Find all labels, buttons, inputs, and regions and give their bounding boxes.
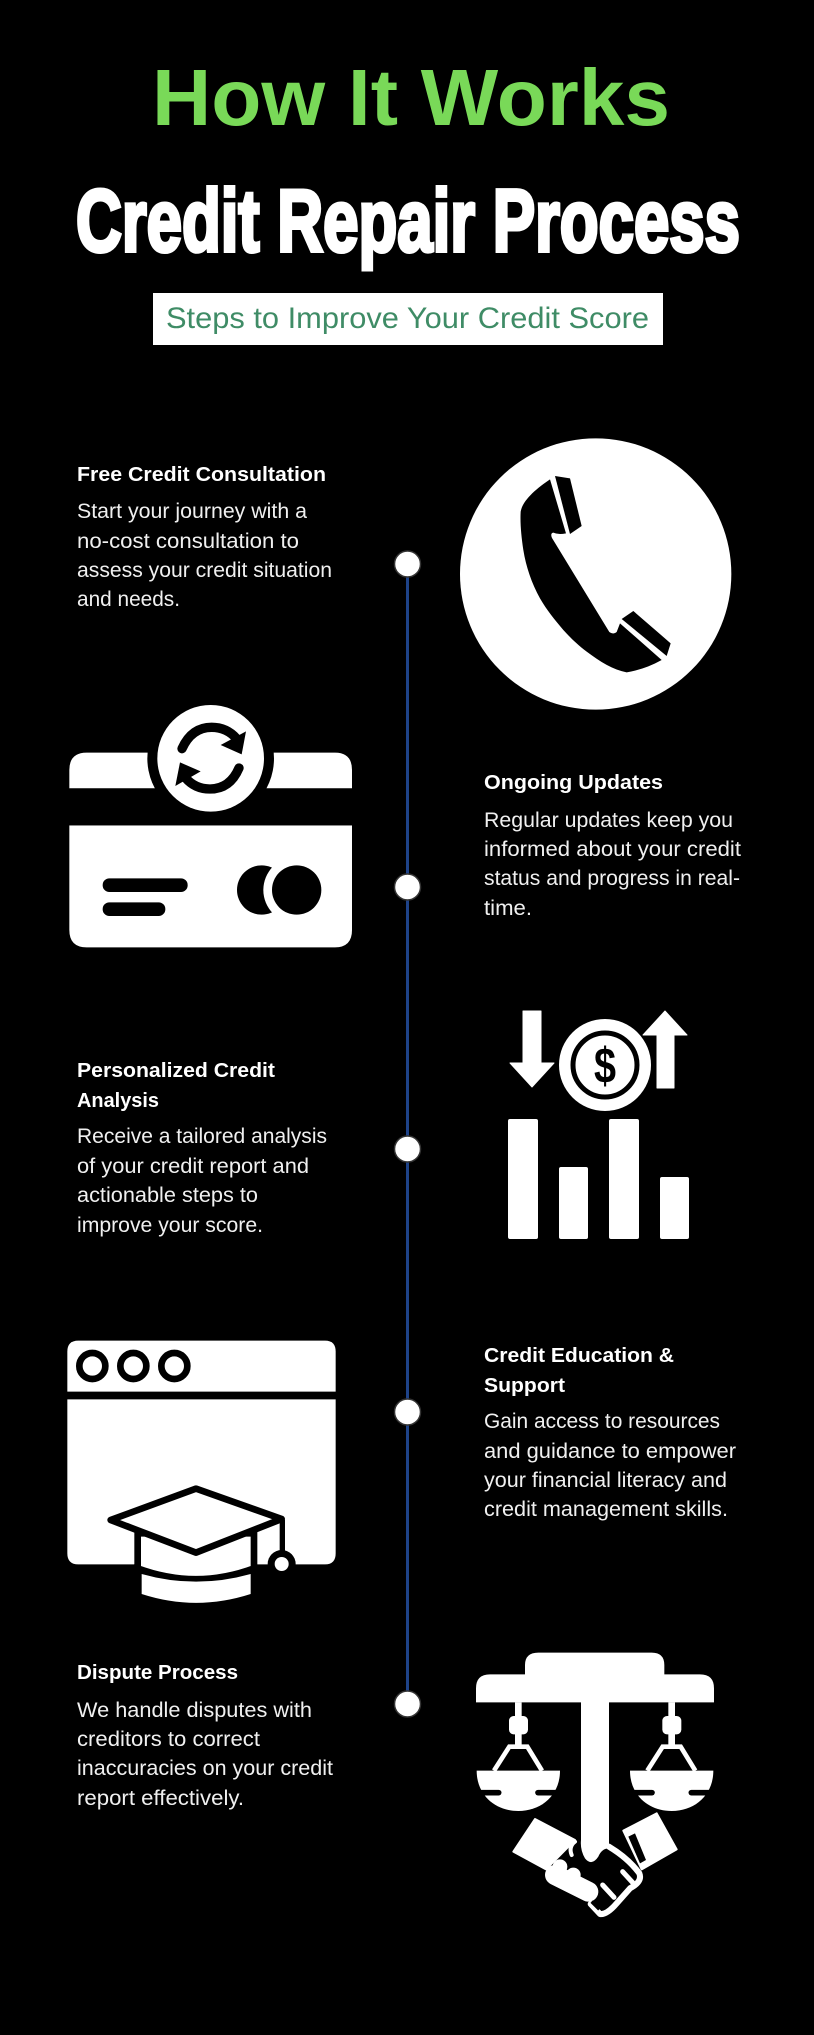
text block: consultation description: Start your journey with a <box>77 500 307 523</box>
text block: education description <box>484 1410 736 1521</box>
text block: dispute description: creditors to correct <box>77 1728 260 1751</box>
timeline <box>394 551 420 1717</box>
text block: consultation description: and needs. <box>77 588 180 611</box>
icon: dollar coin, arrows and bar chart: $ <box>594 1038 616 1094</box>
heading: dispute process: Dispute Process <box>77 1661 238 1684</box>
icon: dollar coin, arrows and bar chart <box>508 1011 689 1239</box>
text block: consultation description: assess your credit situation <box>77 559 332 582</box>
text block: education description: credit management skills. <box>484 1498 728 1521</box>
heading: free credit consultation: Free Credit Consultation <box>77 463 326 486</box>
heading: credit education and support: Credit Education & <box>484 1344 674 1367</box>
subtitle banner <box>153 293 663 345</box>
text block: dispute description <box>77 1699 333 1810</box>
text block: updates description <box>484 809 741 920</box>
text block: dispute description: We handle disputes with <box>77 1699 312 1722</box>
text block: updates description: time. <box>484 897 532 920</box>
panel: personalized credit analysis <box>77 1011 689 1239</box>
text block: analysis description <box>77 1125 327 1237</box>
text block: education description: your financial literacy and <box>484 1469 727 1492</box>
heading: credit education and support <box>484 1344 674 1397</box>
text block: updates description: Regular updates keep you <box>484 809 733 832</box>
text block: analysis description: of your credit report and <box>77 1155 309 1178</box>
icon: telephone handset <box>460 438 731 710</box>
heading: personalized credit analysis: Personalized Credit <box>77 1059 275 1082</box>
heading: personalized credit analysis: Analysis <box>77 1089 159 1112</box>
text block: education description: and guidance to empower <box>484 1440 736 1463</box>
text block: consultation description <box>77 500 332 611</box>
panel: ongoing updates <box>69 695 741 947</box>
panel: dispute process <box>77 1653 714 1914</box>
text block: analysis description: improve your score. <box>77 1214 263 1237</box>
heading: personalized credit analysis <box>77 1059 275 1112</box>
text block: analysis description: actionable steps to <box>77 1184 258 1207</box>
text block: consultation description: no-cost consultation to <box>77 530 299 553</box>
heading: credit education and support: Support <box>484 1374 565 1397</box>
text block: dispute description: inaccuracies on your credit <box>77 1757 333 1780</box>
panel: free credit consultation <box>77 438 731 710</box>
text block: education description: Gain access to resources <box>484 1410 720 1433</box>
text block: updates description: informed about your credit <box>484 838 741 861</box>
panel: credit education and support <box>67 1341 736 1603</box>
text block: dispute description: report effectively. <box>77 1787 244 1810</box>
icon: credit card with refresh <box>69 695 352 947</box>
title: How It Works: How It Works <box>152 53 670 142</box>
text block: updates description: status and progress in real- <box>484 867 740 890</box>
heading: ongoing updates: Ongoing Updates <box>484 771 663 794</box>
text block: analysis description: Receive a tailored analysis <box>77 1125 327 1148</box>
icon: justice scales with handshake <box>476 1653 714 1914</box>
subtitle banner: Steps to Improve Your Credit Score <box>166 302 649 335</box>
icon: browser window with graduation cap <box>67 1341 336 1603</box>
